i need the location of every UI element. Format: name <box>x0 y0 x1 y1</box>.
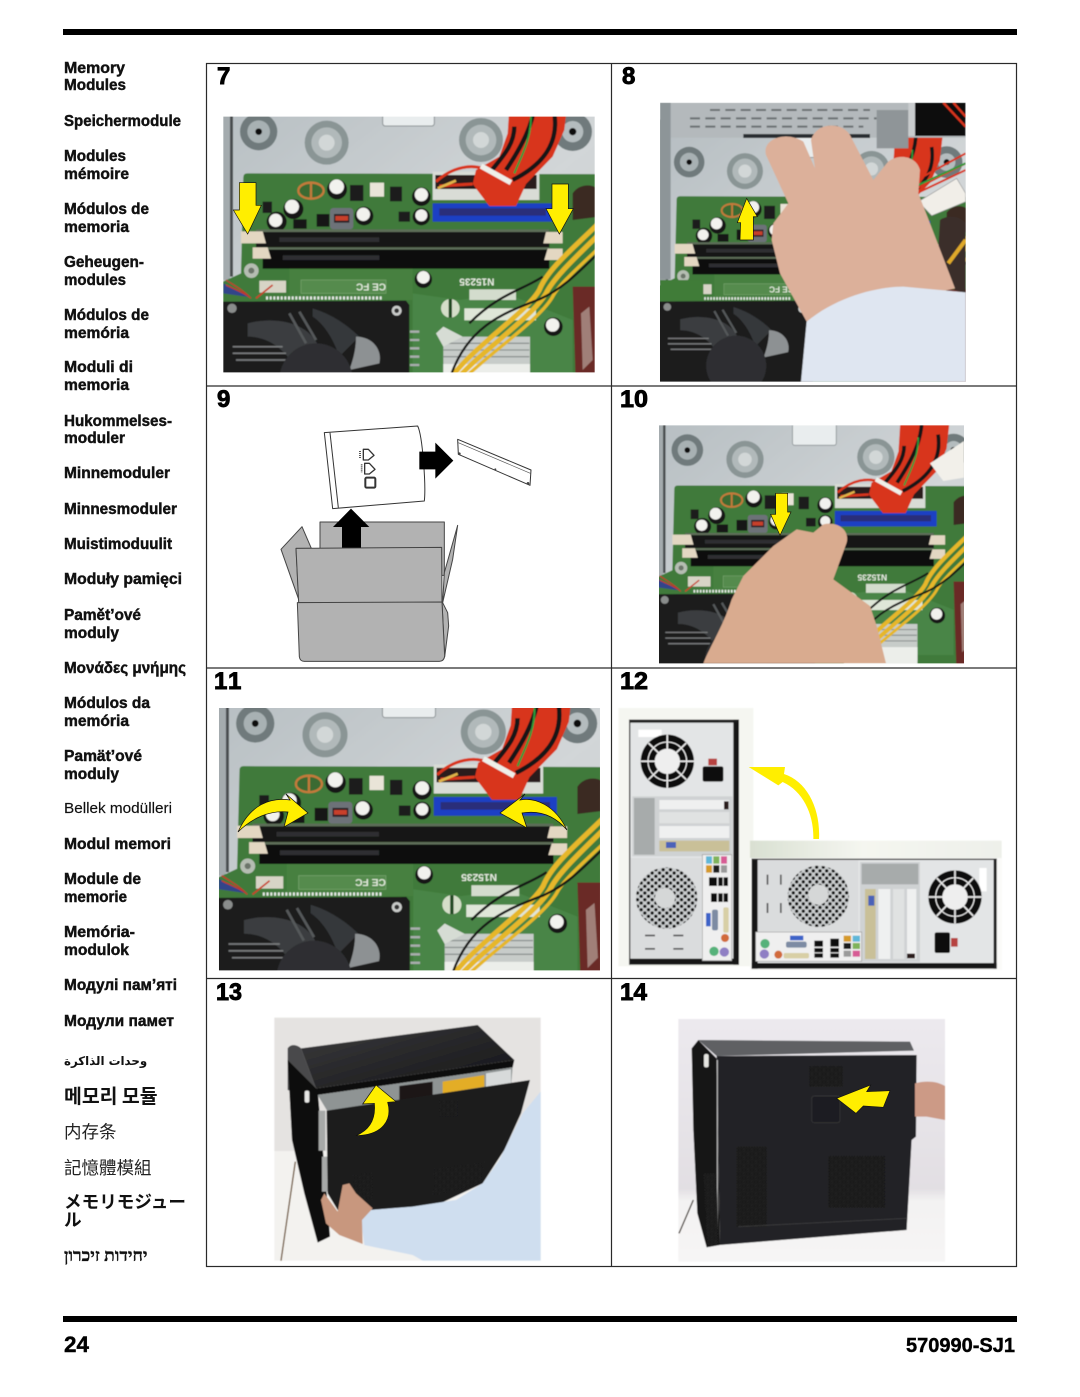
left column: language list: Hukommelses- <box>64 413 172 430</box>
left column: language list: Geheugen- <box>64 254 144 271</box>
left column: language list: Módulos de <box>64 307 149 324</box>
left column: language list: memoria <box>64 377 129 394</box>
step table frame <box>206 64 1016 1266</box>
photo: motherboard with two yellow down arrows <box>223 116 595 372</box>
panel: step 13 <box>216 979 541 1261</box>
left column: language list: Moduli di <box>64 359 133 376</box>
left column: language list: memória <box>64 713 129 730</box>
left column: language list: moduly <box>64 766 119 783</box>
left column: language list: Pamät’ové <box>64 748 142 765</box>
left column: language list: Módulos da <box>64 695 150 712</box>
arrow: left clip <box>238 794 308 832</box>
left column: language list: Bellek modülleri <box>64 801 172 817</box>
top rule <box>63 29 1017 35</box>
left column: language list: 메모리 모듈 <box>64 1080 158 1109</box>
left column: language list: memoria <box>64 219 129 236</box>
left column: language list: mémoire <box>64 166 129 183</box>
panel: step 12: 12 <box>620 668 648 695</box>
left column: language list: Memory <box>64 60 125 77</box>
left column: language list: Minnesmoduler <box>64 501 177 518</box>
page number: 24 <box>64 1332 90 1357</box>
left column: language list: Pamět’ové <box>64 607 141 624</box>
left column: language list: Muistimoduulit <box>64 536 172 553</box>
photo: side panel being attached <box>274 1018 541 1261</box>
photo: finger pressing module <box>659 425 964 664</box>
icon: open cardboard box <box>281 522 458 661</box>
left column: language list: memorie <box>64 889 127 906</box>
panel: step 10: 10 <box>620 386 648 413</box>
left column: language list: Minnemoduler <box>64 465 170 482</box>
panel: step 9: 9 <box>217 386 230 413</box>
photo: motherboard with curved clip arrows <box>219 708 600 970</box>
left column: language list: Módulos de <box>64 201 149 218</box>
icon: anti-static bag <box>324 426 425 509</box>
left column: language list: Moduły pamięci <box>64 571 182 588</box>
illustration: memory bag lifted from box <box>281 426 531 661</box>
left column: language list: Modules <box>64 148 126 165</box>
left column: language list: modules <box>64 272 126 289</box>
arrow: yellow curved <box>749 767 819 839</box>
panel: step 7 <box>218 67 595 372</box>
arrow: right <box>419 443 453 479</box>
left column: language list: modulok <box>64 942 129 959</box>
document code: 570990-SJ1 <box>906 1335 1015 1357</box>
arrow: right clip <box>500 794 567 830</box>
left column: language list: יחידות זיכרון <box>64 1245 147 1265</box>
left column: language list: Модулі пам’яті <box>64 977 177 994</box>
photo: tower rotated from horizontal to upright <box>618 708 1002 970</box>
panel: step 8 <box>622 66 966 382</box>
panel: step 7: 7 <box>217 63 230 90</box>
panel: step 14 <box>620 979 945 1262</box>
panel: step 11: 11 <box>214 668 241 695</box>
left column: language list: Modules <box>64 77 126 94</box>
panel: step 12 <box>618 668 1002 970</box>
left column: language list: ル <box>64 1207 82 1232</box>
left column: language list: メモリモジュー <box>64 1189 186 1214</box>
panel: step 11 <box>215 672 600 970</box>
panel: step 14: 14 <box>620 979 648 1006</box>
left column: language list: Modul memori <box>64 836 171 853</box>
left column: language list: Μονάδες μνήμης <box>64 660 186 677</box>
panel: step 13: 13 <box>216 979 242 1006</box>
left column: language list <box>64 60 186 1265</box>
panel: step 10 <box>621 390 964 664</box>
left column: language list: moduly <box>64 625 119 642</box>
left column: language list: Module de <box>64 871 141 888</box>
bottom rule <box>63 1316 1017 1322</box>
left column: language list: Модули памет <box>64 1013 174 1030</box>
left column: language list: Speichermodule <box>64 113 181 130</box>
photo: side panel slid closed <box>678 1019 945 1262</box>
left column: language list: 内存条 <box>64 1119 116 1144</box>
left column: language list: moduler <box>64 430 125 447</box>
photo: hand lifting memory module <box>660 102 966 382</box>
left column: language list: 記憶體模組 <box>64 1155 152 1180</box>
panel: step 8: 8 <box>622 63 635 90</box>
left column: language list: Memória- <box>64 924 135 941</box>
left column: language list: memória <box>64 325 129 342</box>
panel: step 9 <box>217 386 531 661</box>
icon: memory module <box>458 439 531 485</box>
left column: language list: وحدات الذاكرة <box>64 1054 147 1069</box>
arrow: up <box>333 509 369 548</box>
